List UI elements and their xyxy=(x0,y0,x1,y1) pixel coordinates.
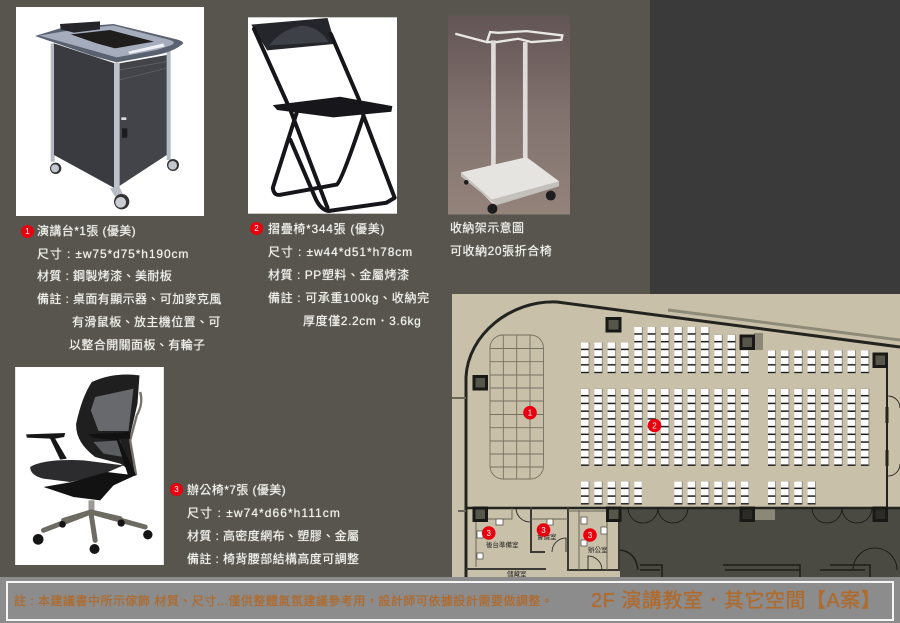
capacity: 可收納20張折合椅 xyxy=(450,244,552,258)
notes: 備註 : 椅背腰部結構高度可調整 xyxy=(187,552,359,566)
marker 3: 3 xyxy=(174,485,179,494)
size: 尺寸 : ±w74*d66*h111cm xyxy=(187,506,341,520)
material: 材質 : 高密度網布、塑膠、金屬 xyxy=(187,529,359,543)
photo: lectern xyxy=(16,7,204,216)
marker 2 xyxy=(250,222,263,235)
marker 2: 2 xyxy=(254,224,259,233)
caption: 收納架示意圖 xyxy=(450,221,524,235)
floor plan xyxy=(452,294,900,577)
notes line 3: 以整合開關面板、有輪子 xyxy=(69,338,205,352)
stage xyxy=(490,335,544,479)
disclaimer: 註 : 本建議書中所示傢飾 材質、尺寸...僅供整體氣氛建議參考用，設計師可依據設計需要做調整。 xyxy=(14,594,553,608)
marker 1 xyxy=(21,225,34,238)
section title: 2F 演講教室．其它空間【A案】 xyxy=(591,590,881,612)
columns xyxy=(474,318,886,520)
size: 尺寸 : ±w44*d51*h78cm xyxy=(268,245,413,259)
seating blocks xyxy=(581,327,871,505)
spec: office chair xyxy=(170,483,359,566)
notes: 備註 : 可承重100kg、收納完 xyxy=(268,291,430,305)
office chairs xyxy=(477,517,607,559)
plan marker numbers: 3 xyxy=(588,531,593,540)
spec: folding chair xyxy=(250,222,430,328)
dark adjacent area xyxy=(620,507,900,577)
photo: folding chair xyxy=(248,17,397,214)
notes: 備註 : 桌面有顯示器、可加麥克風 xyxy=(37,292,222,306)
notes line 2: 有滑鼠板、放主機位置、可 xyxy=(72,315,221,329)
spec: storage rack xyxy=(450,221,552,258)
marker 3 xyxy=(170,483,183,496)
room labels: 後台準備室 xyxy=(486,540,519,549)
room labels xyxy=(486,532,608,578)
name: 演講台*1張 (優美) xyxy=(37,224,136,238)
plan marker numbers: 1 xyxy=(528,408,533,418)
name: 摺疊椅*344張 (優美) xyxy=(268,222,385,236)
walls xyxy=(450,302,900,577)
room labels: 辦公室 xyxy=(588,545,608,554)
plan markers xyxy=(482,406,661,542)
footer bar xyxy=(0,577,900,623)
plan marker numbers: 3 xyxy=(486,529,491,538)
footer frame xyxy=(6,581,894,621)
room labels: 會議室 xyxy=(537,532,557,541)
material: 材質 : 鋼製烤漆、美耐板 xyxy=(37,269,172,283)
name: 辦公椅*7張 (優美) xyxy=(187,483,286,497)
material: 材質 : PP塑料、金屬烤漆 xyxy=(268,268,410,282)
plan marker numbers: 3 xyxy=(541,526,546,535)
photo: office chair xyxy=(15,367,164,565)
dark corner panel xyxy=(650,0,900,294)
photo: storage rack xyxy=(448,16,570,214)
plan marker numbers: 2 xyxy=(652,422,657,430)
hatch patches xyxy=(754,333,775,520)
plan marker numbers xyxy=(486,408,657,540)
notes line 2: 厚度僅2.2cm．3.6kg xyxy=(303,314,421,328)
marker 1: 1 xyxy=(25,227,30,236)
spec: lectern xyxy=(21,224,222,352)
size: 尺寸 : ±w75*d75*h190cm xyxy=(37,247,189,261)
